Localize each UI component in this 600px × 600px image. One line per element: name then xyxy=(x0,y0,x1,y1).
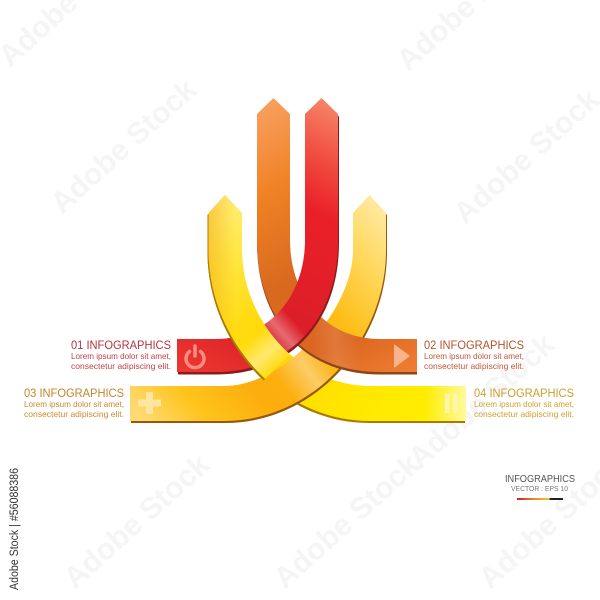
label 04: 04 INFOGRAPHICS xyxy=(474,386,574,400)
band 04: yellow left arrow xyxy=(208,195,466,423)
watermark: Adobe Stock xyxy=(58,448,216,595)
yellow band overlap above red band xyxy=(208,195,291,380)
band 02: orange arrow xyxy=(257,98,417,374)
label 03: 03 INFOGRAPHICS xyxy=(24,386,124,400)
watermark: Adobe Stock xyxy=(45,73,203,220)
label 01 xyxy=(71,338,171,371)
label 03: Lorem ipsum dolor sit amet, xyxy=(24,399,124,409)
label 02: 02 INFOGRAPHICS xyxy=(424,338,524,352)
label 04: consectetur adipiscing elit. xyxy=(474,409,574,419)
label 02: consectetur adipiscing elit. xyxy=(424,361,524,371)
label 04 xyxy=(474,386,574,419)
label 04: Lorem ipsum dolor sit amet, xyxy=(474,399,574,409)
band 03: amber right arrow xyxy=(130,195,387,423)
label 01: Lorem ipsum dolor sit amet, xyxy=(71,351,171,361)
icon: pause xyxy=(445,394,458,413)
label 03: consectetur adipiscing elit. xyxy=(24,409,124,419)
label 01: consectetur adipiscing elit. xyxy=(71,361,171,371)
icon: play xyxy=(394,344,410,368)
icon: power xyxy=(186,346,204,368)
footer logo block: VECTOR : EPS 10 xyxy=(511,484,568,493)
label 02 xyxy=(424,338,524,371)
footer logo block xyxy=(505,473,575,500)
label 03 xyxy=(24,386,124,419)
watermark: Adobe Stock xyxy=(403,328,561,475)
band 01: red arrow xyxy=(177,98,339,374)
icon: plus xyxy=(138,392,161,414)
footer logo block: INFOGRAPHICS xyxy=(505,473,575,485)
label 01: 01 INFOGRAPHICS xyxy=(71,338,171,352)
label 02: Lorem ipsum dolor sit amet, xyxy=(424,351,524,361)
stock id vertical text: Adobe Stock | #56088386 xyxy=(9,468,21,590)
watermark: Adobe Stock xyxy=(268,448,426,595)
